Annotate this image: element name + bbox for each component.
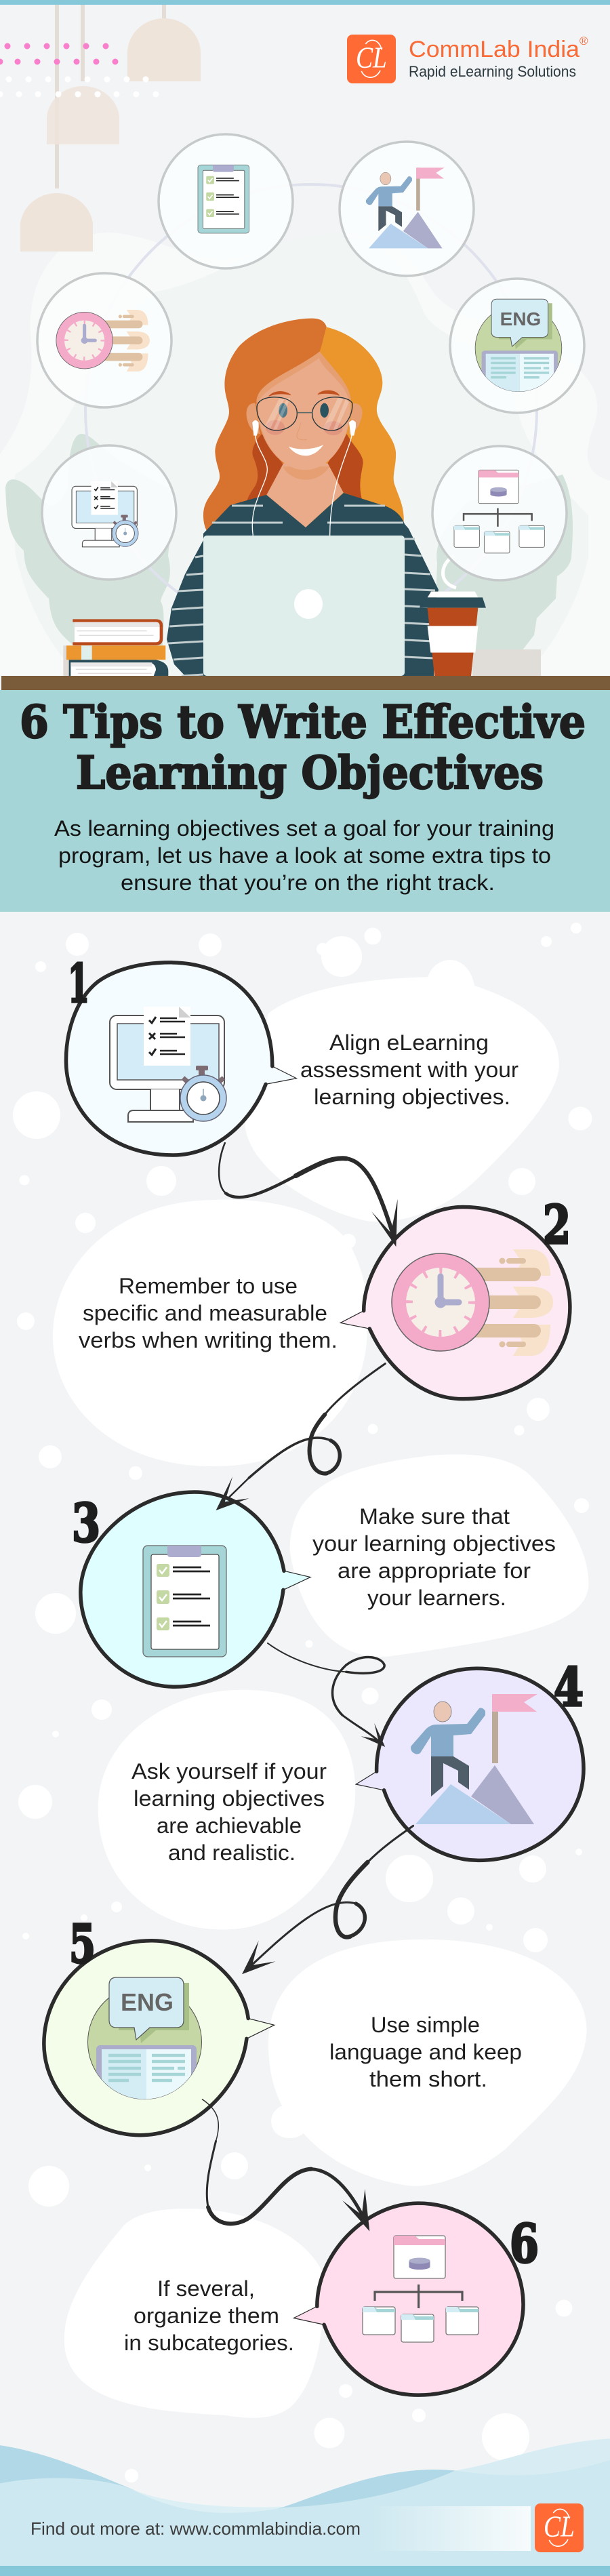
- logo: CommLab India header: CL: [356, 41, 387, 74]
- hair: left side: [203, 319, 327, 540]
- earphones: [252, 420, 356, 536]
- smile: [289, 445, 323, 456]
- text: tip 6: If several,: [157, 2276, 255, 2301]
- ring linking the icons: [85, 184, 537, 636]
- text: tip 4: learning objectives: [134, 1786, 325, 1811]
- hero scene backdrop: [0, 233, 610, 676]
- logo: footer: CL: [544, 2510, 575, 2543]
- icon: monitor with stopwatch: [110, 1007, 226, 1122]
- logo: CommLab India header: CommLab India: [409, 37, 580, 62]
- shirt stripes: [168, 506, 435, 676]
- eyes: [279, 403, 287, 418]
- arrowhead: tip 1 to 2: [371, 1199, 398, 1247]
- text: tip 3: your learning objectives: [312, 1531, 556, 1556]
- footer waves: [0, 2438, 610, 2576]
- woman with laptop: [167, 319, 439, 676]
- number 2: 2: [543, 1194, 571, 1256]
- lens reflections: [264, 398, 349, 430]
- intro text: [54, 816, 554, 895]
- icon: climber with flag: [411, 1694, 537, 1824]
- text: tip 4: [131, 1759, 327, 1865]
- text: tip 3: your learners.: [367, 1586, 506, 1610]
- text: tip 3: [312, 1504, 556, 1610]
- text: tip 6: [124, 2276, 294, 2355]
- bubble: tip 4: [131, 1668, 584, 1865]
- shirt: [167, 493, 439, 676]
- arrow: tip 1 to 2: [219, 1143, 395, 1240]
- icon: ENG book: [88, 1977, 202, 2106]
- hair: right side: [303, 325, 404, 540]
- text: tip 1: learning objectives.: [314, 1085, 510, 1109]
- neck shadow: [283, 466, 329, 480]
- hero bubble: ENG book: [450, 279, 584, 413]
- background bubbles: [13, 923, 592, 2461]
- hero bubble: climber: [340, 142, 474, 276]
- fringe: [246, 325, 327, 402]
- text: tip 5: them short.: [369, 2067, 487, 2091]
- arrow: tip 3 to 4: [268, 1643, 384, 1746]
- bubble: tip 5: [44, 1941, 522, 2135]
- face: [258, 358, 350, 470]
- logo: CommLab India header: [347, 35, 588, 83]
- intro text: As learning objectives set a goal for your training: [54, 816, 554, 841]
- stack of books: [63, 619, 168, 676]
- nose: [297, 422, 307, 440]
- text: tip 1: Align eLearning: [329, 1030, 489, 1055]
- cheeks: [266, 420, 343, 435]
- footer text: Find out more at: www.commlabindia.com: [30, 2518, 361, 2539]
- inner hair: [246, 434, 363, 504]
- text: tip 2: [79, 1274, 338, 1352]
- arrow: tip 2 to 3: [222, 1364, 385, 1504]
- title band: [0, 690, 610, 912]
- text: tip 2: verbs when writing them.: [79, 1328, 338, 1352]
- text: tip 1: [300, 1030, 518, 1109]
- ENG label: ENG: [121, 1988, 174, 2016]
- blob: tip 5: [268, 1939, 587, 2186]
- arrow: tip 4 to 5: [242, 1826, 413, 1974]
- text: tip 5: language and keep: [329, 2040, 522, 2064]
- logo: CommLab India header: ®: [580, 35, 588, 47]
- brows: [269, 390, 340, 396]
- icon: clock: [392, 1249, 553, 1356]
- number 1: 1: [68, 953, 89, 1015]
- bubble: tip 1: [66, 963, 518, 1155]
- hero bubble: assessment monitor: [42, 445, 176, 580]
- text: tip 2: Remember to use: [119, 1274, 298, 1298]
- bubble: tip 3: [81, 1492, 556, 1687]
- number 6: 6: [510, 2213, 539, 2275]
- number 3: 3: [72, 1493, 100, 1554]
- bottom colour bar: [0, 2566, 610, 2576]
- icon: folder hierarchy: [363, 2236, 479, 2342]
- blob: tip 4: [98, 1690, 355, 1929]
- hero bubble: ENG book: ENG: [500, 308, 541, 329]
- blob: tip 6: [64, 2209, 324, 2418]
- text: tip 4: and realistic.: [168, 1840, 296, 1865]
- laptop logo: [294, 589, 323, 619]
- arrowhead: tip 5 to 6: [342, 2189, 369, 2231]
- number 4: 4: [554, 1657, 584, 1718]
- intro text: program, let us have a look at some extra tips to: [58, 843, 551, 868]
- footer gradient strip: [369, 2506, 531, 2551]
- number 5: 5: [69, 1914, 96, 1975]
- blob: tip 1: [245, 960, 559, 1222]
- laptop: [203, 536, 405, 676]
- title: 6 Tips to Write Effective: [20, 696, 586, 748]
- logo: footer: [535, 2503, 584, 2552]
- top colour bar: [0, 0, 610, 5]
- title: [20, 696, 586, 799]
- bubble: tip 2: [79, 1207, 570, 1399]
- text: tip 6: organize them: [134, 2303, 279, 2328]
- blob: tip 2: [53, 1200, 368, 1466]
- neck: [266, 463, 344, 527]
- decorative dots: [0, 43, 159, 98]
- hero bubble: folders: [432, 446, 567, 580]
- text: tip 4: Ask yourself if your: [131, 1759, 327, 1784]
- hanging lamps: [20, 5, 201, 251]
- intro text: ensure that you’re on the right track.: [121, 870, 495, 895]
- blob: tip 3: [290, 1454, 588, 1657]
- logo: CommLab India header: Rapid eLearning Solutions: [409, 63, 576, 80]
- face shadow: [256, 351, 351, 470]
- title: Learning Objectives: [76, 746, 544, 799]
- hero bubble: clock: [37, 273, 171, 407]
- hero bubble: clipboard: [159, 134, 293, 268]
- text: tip 6: in subcategories.: [124, 2331, 294, 2355]
- side items: box and steam: [443, 556, 541, 676]
- plants: [5, 434, 573, 651]
- arrowhead: tip 3 to 4: [361, 1723, 385, 1747]
- text: tip 4: are achievable: [157, 1813, 302, 1838]
- icon: clipboard: [143, 1546, 226, 1657]
- arrowhead: tip 2 to 3: [216, 1476, 249, 1510]
- text: tip 3: are appropriate for: [338, 1558, 531, 1583]
- text: tip 2: specific and measurable: [83, 1301, 327, 1325]
- table top: [1, 676, 610, 690]
- text: tip 1: assessment with your: [300, 1058, 518, 1082]
- coffee cup: [420, 592, 486, 676]
- ears: [247, 403, 363, 434]
- glasses: [257, 397, 352, 430]
- bubble: tip 6: [124, 2203, 523, 2395]
- arrow: tip 5 to 6: [202, 2099, 367, 2227]
- text: tip 5: Use simple: [371, 2013, 480, 2037]
- text: tip 3: Make sure that: [359, 1504, 510, 1529]
- text: tip 5: [329, 2013, 522, 2091]
